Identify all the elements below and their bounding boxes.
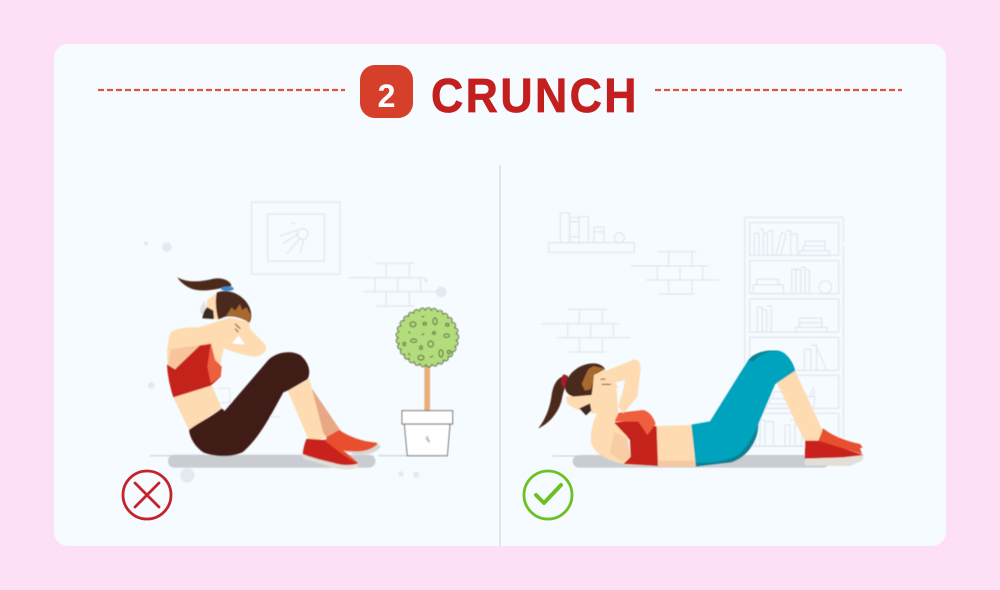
- plant: [399, 310, 456, 456]
- woman doing correct crunch: [538, 350, 864, 467]
- sports bra: [167, 343, 222, 397]
- torso: [167, 327, 227, 430]
- scrunchie: [221, 286, 234, 291]
- sports bra: [614, 420, 658, 466]
- woman sitting up too far: [167, 277, 381, 469]
- face: [228, 317, 250, 335]
- far shoe: [326, 430, 380, 453]
- icon: green check: [524, 471, 572, 519]
- title band: [98, 65, 902, 122]
- background: bricks: [541, 252, 719, 352]
- raised arm: [600, 359, 641, 413]
- background: picture frame: [252, 202, 340, 274]
- hair: [216, 291, 251, 323]
- floor and shadow: [553, 455, 830, 468]
- near arm: [170, 319, 234, 349]
- near shoe: [303, 438, 358, 465]
- panel: wrong form scene: [144, 202, 456, 482]
- panel: correct form scene: [538, 213, 864, 468]
- pants: [189, 352, 309, 456]
- torso skin: [623, 423, 695, 467]
- floor and shadow: [150, 455, 408, 468]
- background: bricks: [218, 263, 437, 417]
- far shoe: [820, 429, 863, 451]
- far shin: [311, 387, 341, 437]
- far arm: [217, 326, 266, 357]
- title: CRUNCH: [431, 69, 637, 122]
- nape: [579, 403, 591, 415]
- pants: [691, 350, 795, 467]
- ponytail: [177, 277, 232, 290]
- neck and nape: [205, 293, 220, 319]
- back shading: [610, 432, 631, 462]
- background: bookcase: [745, 217, 843, 446]
- near shin: [777, 371, 823, 442]
- near shoe: [805, 441, 863, 461]
- back shading: [168, 344, 202, 369]
- near shin: [288, 379, 325, 443]
- background: dots: [144, 241, 447, 482]
- icon: red cross: [123, 471, 171, 519]
- face: [592, 369, 618, 397]
- number badge: [360, 65, 413, 118]
- ponytail: [538, 375, 569, 428]
- scrunchie: [561, 374, 567, 388]
- main panel: [54, 44, 946, 546]
- background: wall shelf: [549, 213, 634, 252]
- hair: [565, 363, 605, 397]
- number badge: 2: [378, 78, 395, 114]
- body and near arm: [566, 390, 631, 464]
